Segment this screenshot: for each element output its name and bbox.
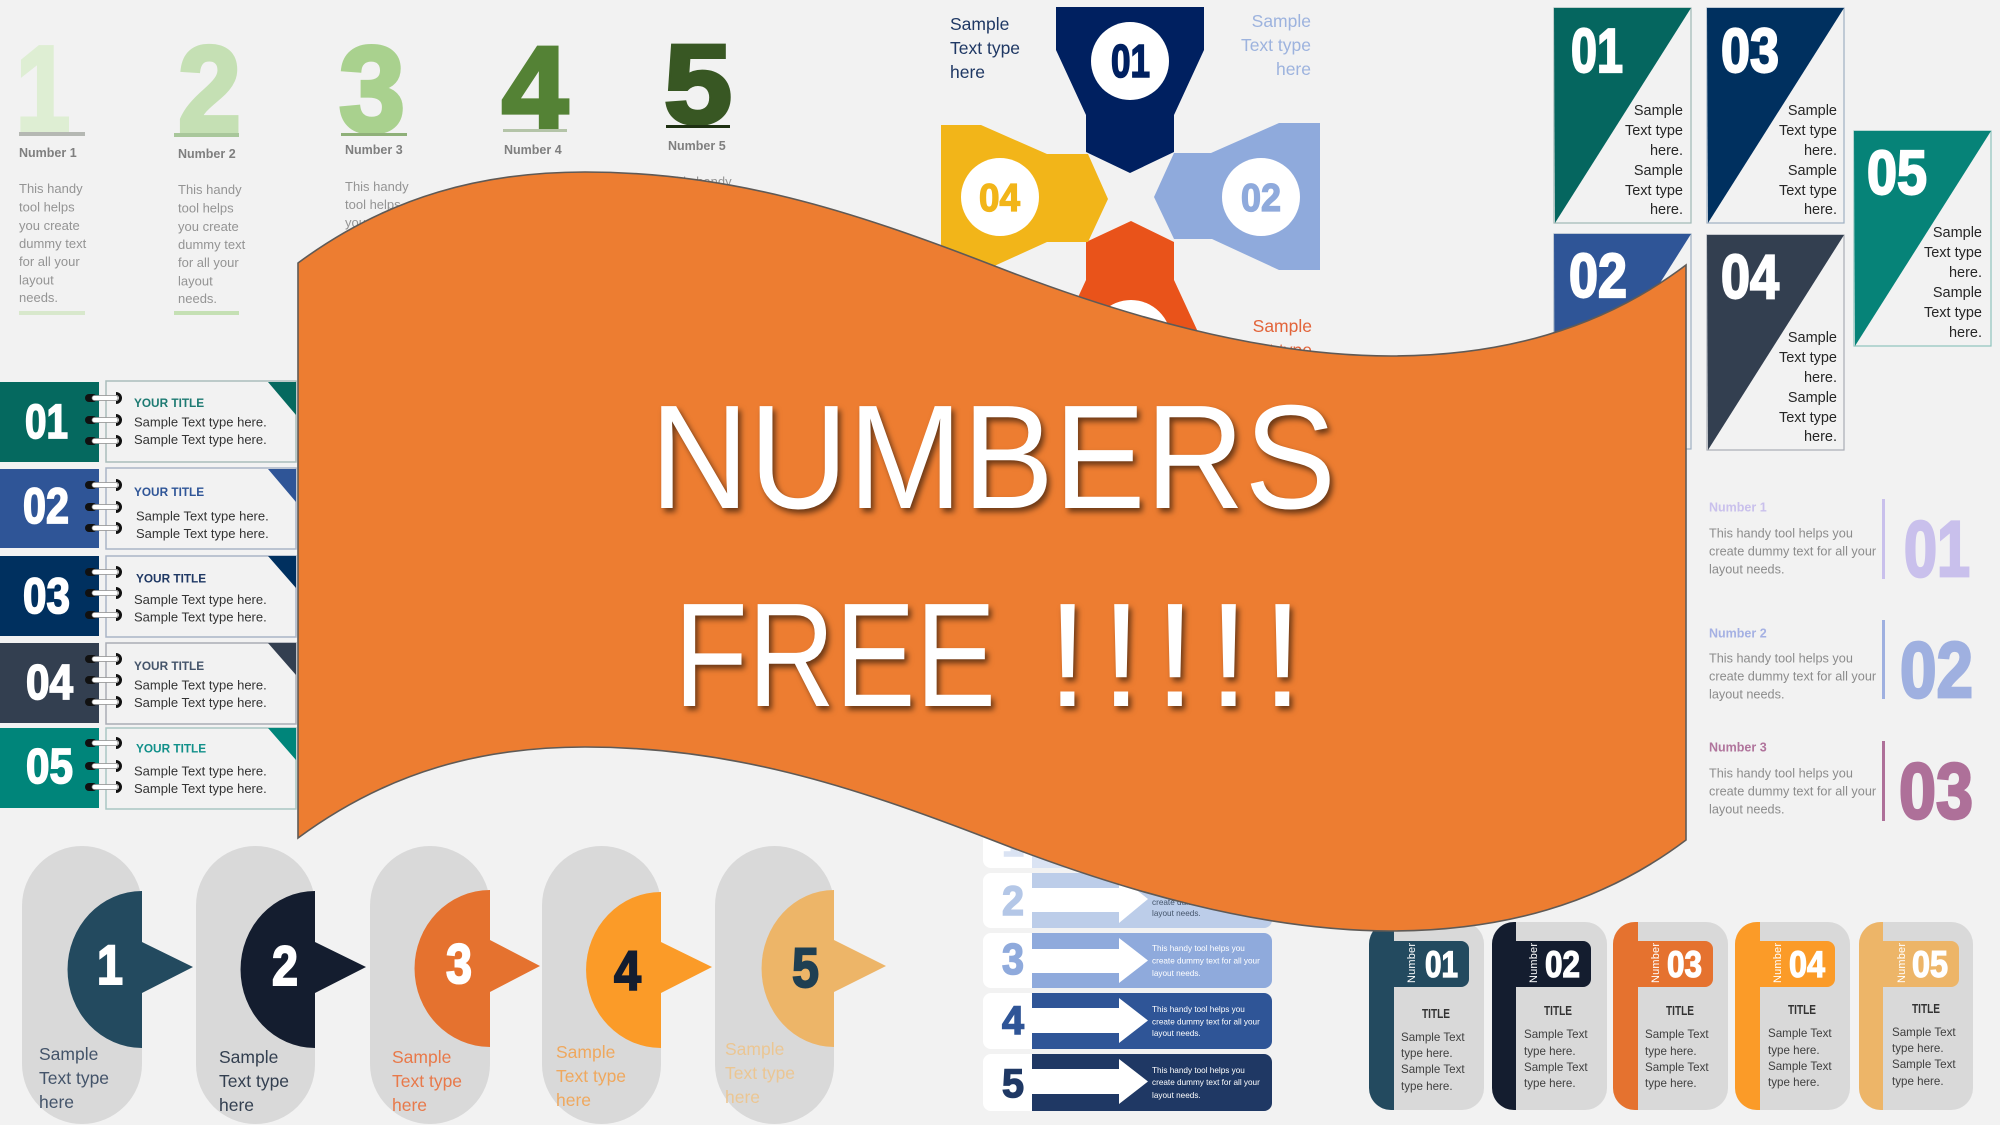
tab card 02: TITLE (1544, 1003, 1572, 1018)
card 05: Sample (1933, 225, 1982, 241)
card 05: here. (1949, 265, 1982, 281)
item 01: Number 1 (1709, 500, 1767, 514)
title (650, 375, 1336, 738)
tab card 05: type here. (1892, 1042, 1944, 1055)
panel: green numbers (16, 21, 732, 315)
row 04: Sample Text type here. (134, 695, 267, 710)
item 01: 01 (1904, 504, 1970, 593)
pill 2: 2 (272, 934, 298, 997)
pill 5: Text type (725, 1063, 795, 1083)
tab card 05: Sample Text (1892, 1058, 1956, 1071)
panel: arrow list (983, 813, 1272, 1111)
card 05: Sample (1933, 285, 1982, 301)
tab card 03 (1613, 922, 1728, 1110)
arrow row 2: create dummy text for all your (1152, 898, 1260, 907)
label 01: Sample (950, 14, 1009, 34)
arrow row 3 (983, 933, 1272, 988)
orange wave banner (298, 172, 1686, 931)
label 02 (1241, 11, 1311, 79)
card 05: here. (1949, 325, 1982, 341)
green number 5 (664, 22, 732, 189)
green number 1: you create (19, 218, 80, 233)
arrow row 5: create dummy text for all your (1152, 1078, 1260, 1087)
row 01: 01 (25, 396, 68, 449)
pill 4: Sample (556, 1042, 615, 1062)
tab card 05: type here. (1892, 1075, 1944, 1088)
card 01: 01 (1571, 17, 1623, 86)
card 04: 04 (1721, 243, 1779, 312)
green number 2: needs. (178, 291, 217, 306)
tab card 04: type here. (1768, 1044, 1820, 1057)
card 02: 02 (1569, 242, 1627, 311)
green number 3: 3 (339, 21, 405, 157)
arrow row 1: 1 (1002, 821, 1024, 865)
item 03: create dummy text for all your (1709, 784, 1877, 798)
pill 1: Text type (39, 1068, 109, 1088)
title word FREE: FREE (674, 573, 996, 738)
tab card 01: type here. (1401, 1047, 1453, 1060)
tab card 02: 02 (1545, 944, 1580, 985)
green number 1: dummy text (19, 236, 87, 251)
tab card 01 (1369, 922, 1484, 1110)
tab card 05: Number (1896, 943, 1908, 983)
arrow row 4 (983, 993, 1272, 1049)
green number 1: tool helps (19, 200, 75, 214)
tab card 01: type here. (1401, 1080, 1453, 1093)
card 03: Sample (1788, 163, 1837, 179)
petal 04: 04 (979, 177, 1020, 220)
pill 5 (715, 846, 886, 1124)
row 04: Sample Text type here. (134, 678, 267, 692)
card 04: here. (1804, 370, 1837, 386)
pill 4: 4 (614, 939, 641, 1002)
row 05 (0, 728, 296, 809)
item 02: This handy tool helps you (1709, 652, 1853, 666)
tab card 02: type here. (1524, 1045, 1576, 1058)
row 03: 03 (23, 568, 70, 624)
card 03: Sample (1788, 103, 1837, 119)
card 01 (1554, 8, 1691, 223)
card 03: Text type (1779, 183, 1837, 199)
title line 1: NUMBERS (650, 375, 1336, 540)
tab card 02: Sample Text (1524, 1028, 1588, 1041)
label 02: Sample (1252, 11, 1311, 31)
green number 4: Number 4 (504, 143, 562, 157)
card 05: Text type (1924, 305, 1982, 321)
pill 3: Text type (392, 1071, 462, 1091)
pill 2: here (219, 1095, 254, 1115)
tab card 04: Sample Text (1768, 1027, 1832, 1040)
green number 4: 4 (502, 23, 568, 155)
panel: purple number list (1709, 499, 1973, 835)
pill 1: 1 (97, 933, 123, 996)
row 01: Sample Text type here. (134, 414, 267, 430)
panel: tabbed number cards (1369, 922, 1973, 1110)
pill 3 (370, 846, 540, 1124)
tab card 03: type here. (1645, 1077, 1697, 1090)
row 02: 02 (23, 478, 69, 534)
pill 5: here (725, 1087, 760, 1107)
tab card 01: 01 (1425, 944, 1458, 985)
green number 1: needs. (19, 290, 58, 305)
arrow row 4: layout needs. (1152, 1029, 1201, 1038)
arrow row 5 (983, 1054, 1272, 1111)
item 02: Number 2 (1709, 626, 1767, 640)
arrow row 5: 5 (1002, 1062, 1024, 1106)
tab card 05 (1859, 922, 1973, 1110)
label 01: here (950, 62, 985, 82)
tab card 05: Sample Text (1892, 1026, 1956, 1039)
pill 2: Sample (219, 1047, 278, 1067)
pill 3: 3 (446, 932, 472, 995)
pill 1: here (39, 1092, 74, 1112)
green number 2: This handy (178, 182, 242, 197)
tab card 05: 05 (1912, 944, 1948, 985)
tab card 05: TITLE (1912, 1001, 1940, 1016)
tab card 04: Sample Text (1768, 1060, 1832, 1073)
item 03: This handy tool helps you (1709, 766, 1853, 780)
tab card 03: TITLE (1666, 1003, 1694, 1018)
card 03: here. (1804, 202, 1837, 218)
green number 2: 2 (178, 21, 241, 157)
pill 1: Sample (39, 1044, 98, 1064)
card 03: 03 (1721, 17, 1779, 86)
title exclamation marks: !!!!! (1047, 573, 1303, 738)
card 01: Sample (1634, 163, 1683, 179)
pill 5: 5 (792, 936, 819, 999)
row 03: Sample Text type here. (134, 610, 267, 624)
green number 2: layout (178, 274, 213, 288)
green number 2: for all your (178, 255, 239, 270)
tab card 02: Number (1528, 943, 1540, 983)
pill 1 (22, 846, 193, 1124)
green number 3: This handy (345, 179, 409, 194)
label 03: Sample (1253, 316, 1312, 336)
card 01: Text type (1625, 123, 1683, 139)
card 02 (1554, 234, 1691, 449)
panel: spiral notebook list (0, 381, 296, 809)
row 02: Sample Text type here. (136, 526, 269, 541)
tab card 03: Sample Text (1645, 1028, 1709, 1041)
row 04: 04 (26, 656, 73, 710)
green number 3: you create (345, 215, 406, 230)
arrow row 2: layout needs. (1152, 909, 1201, 918)
green number 1: for all your (19, 254, 80, 269)
tab card 02: type here. (1524, 1077, 1576, 1090)
green number 1 (16, 21, 87, 315)
card 05: 05 (1867, 139, 1927, 208)
label 02: here (1276, 59, 1311, 79)
item 03: layout needs. (1709, 802, 1784, 816)
tab card 04: type here. (1768, 1076, 1820, 1089)
tab card 03: Number (1650, 943, 1662, 983)
pill 2 (196, 846, 366, 1124)
card 04: Sample (1788, 390, 1837, 406)
row 05: 05 (26, 740, 73, 794)
pill 4 (542, 846, 712, 1124)
tab card 04: Number (1772, 943, 1784, 983)
arrow row 1 (983, 813, 1272, 868)
green number 2: you create (178, 219, 239, 234)
item 01: layout needs. (1709, 562, 1784, 576)
label 03 (1242, 316, 1312, 360)
green number 2 (174, 21, 246, 315)
tab card 04 (1735, 922, 1850, 1110)
panel: hexagon cross (941, 7, 1320, 388)
row 05: Sample Text type here. (134, 781, 267, 796)
item 01: create dummy text for all your (1709, 544, 1877, 558)
tab card 04: TITLE (1788, 1002, 1816, 1017)
row 01 (0, 381, 296, 462)
tab card 01: Number (1406, 943, 1418, 983)
item 01: This handy tool helps you (1709, 526, 1853, 540)
green number 1: Number 1 (19, 146, 77, 160)
arrow row 3: create dummy text for all your (1152, 956, 1260, 966)
label 02: Text type (1241, 35, 1311, 55)
green number 1: This handy (19, 181, 83, 196)
label 01 (950, 14, 1020, 82)
green number 3: Number 3 (345, 143, 403, 157)
green number 2: tool helps (178, 200, 234, 216)
green number 2: dummy text (178, 237, 246, 252)
arrow row 3: This handy tool helps you (1152, 944, 1245, 953)
row 01: YOUR TITLE (134, 396, 204, 410)
green number 1: layout (19, 272, 54, 288)
card 01: Text type (1625, 183, 1683, 199)
card 05: Text type (1924, 245, 1982, 261)
pill 4: Text type (556, 1066, 626, 1086)
row 05: YOUR TITLE (136, 742, 206, 756)
card 04 (1707, 235, 1844, 450)
card 05 (1854, 131, 1991, 346)
arrow row 4: 4 (1002, 999, 1025, 1043)
row 03 (0, 556, 296, 637)
tab card 02 (1492, 922, 1607, 1110)
tab card 04: 04 (1789, 944, 1825, 985)
row 02: Sample Text type here. (136, 508, 269, 524)
tab card 03: 03 (1667, 944, 1702, 985)
item 01 (1709, 499, 1970, 593)
panel: diagonal cards (1554, 8, 1991, 450)
tab card 01: TITLE (1422, 1006, 1450, 1021)
pill 5: Sample (725, 1039, 784, 1059)
green number 5: This handy (668, 174, 732, 189)
green number 5: 5 (664, 22, 732, 147)
arrow row 2 (983, 873, 1272, 928)
label 03: Text type (1242, 340, 1312, 360)
pill 4: here (556, 1090, 591, 1110)
item 03: 03 (1899, 746, 1973, 835)
tab card 03: Sample Text (1645, 1061, 1709, 1074)
card 04: Text type (1779, 350, 1837, 366)
item 02: layout needs. (1709, 688, 1784, 702)
row 02 (0, 468, 296, 549)
green number 3 (339, 21, 409, 230)
row 01: Sample Text type here. (134, 432, 267, 447)
petal 01 (1056, 7, 1204, 173)
row 03: YOUR TITLE (136, 572, 206, 586)
green number 3: tool helps (345, 197, 401, 212)
petal 02 (1154, 123, 1320, 270)
tab card 02: Sample Text (1524, 1061, 1588, 1074)
label 01: Text type (950, 38, 1020, 58)
arrow row 4: This handy tool helps you (1152, 1005, 1245, 1014)
arrow row 5: layout needs. (1152, 1091, 1201, 1100)
green number 5: Number 5 (668, 139, 726, 153)
card 01: here. (1650, 143, 1683, 159)
arrow row 4: create dummy text for all your (1152, 1018, 1260, 1026)
arrow row 5: This handy tool helps you (1152, 1066, 1245, 1075)
item 02: 02 (1900, 625, 1973, 714)
petal 04 (941, 125, 1108, 272)
tab card 01: Sample Text (1401, 1063, 1465, 1076)
card 04: Text type (1779, 410, 1837, 426)
pill 3: Sample (392, 1047, 451, 1067)
petal 01: 01 (1111, 35, 1150, 87)
row 02: YOUR TITLE (134, 485, 204, 499)
green number 1: 1 (16, 21, 70, 157)
item 02: create dummy text for all your (1709, 670, 1877, 684)
petal 02: 02 (1241, 177, 1281, 220)
arrow row 3: 3 (1002, 935, 1024, 984)
item 02 (1709, 620, 1973, 714)
card 01: here. (1650, 202, 1683, 218)
panel: arrow pills (22, 846, 886, 1124)
green number 2: Number 2 (178, 147, 236, 161)
row 03: Sample Text type here. (134, 592, 267, 607)
card 03 (1707, 8, 1844, 223)
arrow row 2: 2 (1002, 877, 1024, 924)
row 04: YOUR TITLE (134, 659, 204, 673)
tab card 01: Sample Text (1401, 1031, 1465, 1044)
card 04: here. (1804, 429, 1837, 445)
pill 2: Text type (219, 1071, 289, 1091)
petal 03 (1056, 221, 1204, 388)
row 04 (0, 643, 296, 724)
item 03 (1709, 740, 1973, 835)
card 03: here. (1804, 143, 1837, 159)
card 01: Sample (1634, 103, 1683, 119)
card 04: Sample (1788, 330, 1837, 346)
item 03: Number 3 (1709, 740, 1767, 754)
arrow row 3: layout needs. (1152, 969, 1201, 978)
pill 3: here (392, 1095, 427, 1115)
card 03: Text type (1779, 123, 1837, 139)
tab card 03: type here. (1645, 1045, 1697, 1058)
row 05: Sample Text type here. (134, 764, 267, 778)
